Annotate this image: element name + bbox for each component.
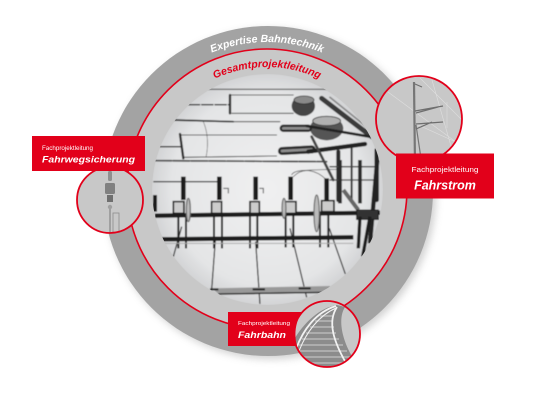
- inner circle: Gesamtprojektleitung: [127, 49, 407, 329]
- callout: Fahrstrom: [376, 76, 494, 198]
- label box: Fachprojektleitung: [42, 146, 93, 152]
- inner circle title: Gesamtprojektleitung: [214, 60, 322, 80]
- label box: [32, 136, 145, 171]
- belts: [279, 124, 312, 133]
- frame: [322, 98, 372, 137]
- label box: Fachprojektleitung: [412, 167, 479, 174]
- callout: Fahrbahn: [228, 301, 360, 372]
- tension units: [173, 177, 190, 248]
- lower rigging: [153, 160, 380, 304]
- photo: overhead line tensioning equipment: [152, 74, 383, 305]
- icon: rail signal: [77, 167, 143, 239]
- ground slab: [212, 286, 330, 295]
- icon: curved railway track: [292, 301, 360, 372]
- infographic: [32, 26, 494, 368]
- callout: Fahrwegsicherung: [32, 136, 145, 239]
- outer ring: Expertise Bahntechnik: [103, 26, 433, 356]
- pulleys: [291, 100, 316, 116]
- icon: catenary mast: [376, 76, 462, 165]
- wires to ground: [173, 227, 182, 257]
- ring shadow: [106, 29, 436, 359]
- ring title: Expertise Bahntechnik: [210, 34, 324, 52]
- label box: Fachprojektleitung: [238, 321, 290, 327]
- upper rigging: [155, 89, 377, 200]
- label box: Fahrwegsicherung: [42, 154, 135, 166]
- label box: Fahrstrom: [414, 178, 476, 192]
- label box: Fahrbahn: [238, 330, 286, 341]
- label box: [228, 312, 302, 346]
- label box: [396, 154, 494, 198]
